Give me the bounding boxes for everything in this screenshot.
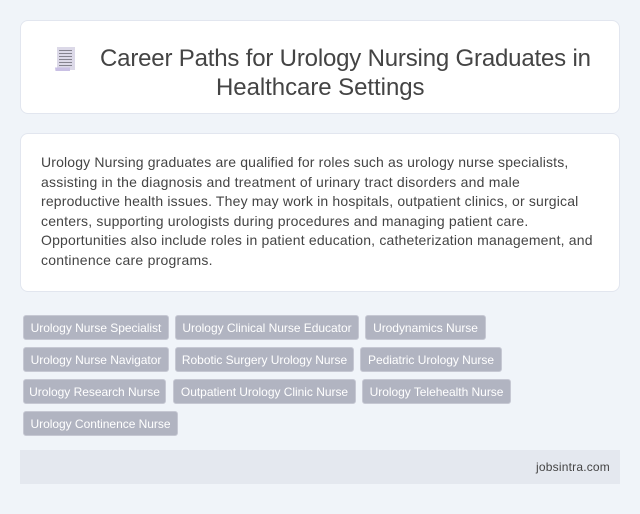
icon: document [55, 47, 75, 71]
description text: centers, supporting urologists during procedures and managing patient care. [41, 213, 528, 229]
tags: Outpatient Urology Clinic Nurse [181, 385, 348, 399]
tags: Robotic Surgery Urology Nurse [182, 353, 347, 367]
tags: Urology Telehealth Nurse [370, 385, 503, 399]
title: Healthcare Settings [216, 74, 424, 101]
tags: Urology Clinical Nurse Educator [182, 321, 352, 335]
description text: assisting in the diagnosis and treatment of urinary tract disorders and male [41, 174, 520, 190]
description text: continence care programs. [41, 252, 213, 268]
panel: description card [20, 133, 620, 292]
title: Career Paths for Urology Nursing Graduates in [100, 45, 591, 72]
title [100, 45, 591, 101]
description text: reproductive health issues. They may work in hospitals, outpatient clinics, or surgical [41, 193, 578, 209]
description text: Urology Nursing graduates are qualified for roles such as urology nurse specialists, [41, 154, 568, 170]
tags: Urology Nurse Navigator [31, 353, 161, 367]
tags: Urology Research Nurse [29, 385, 160, 399]
tags: Urodynamics Nurse [373, 321, 478, 335]
tags: Urology Nurse Specialist [31, 321, 161, 335]
description text: Opportunities also include roles in patient education, catheterization management, and [41, 232, 593, 248]
description text [41, 154, 593, 268]
footer [20, 450, 620, 484]
tags: Pediatric Urology Nurse [368, 353, 494, 367]
panel: title card [20, 20, 620, 114]
tags: Urology Continence Nurse [30, 417, 171, 431]
footer: jobsintra.com [536, 460, 610, 474]
